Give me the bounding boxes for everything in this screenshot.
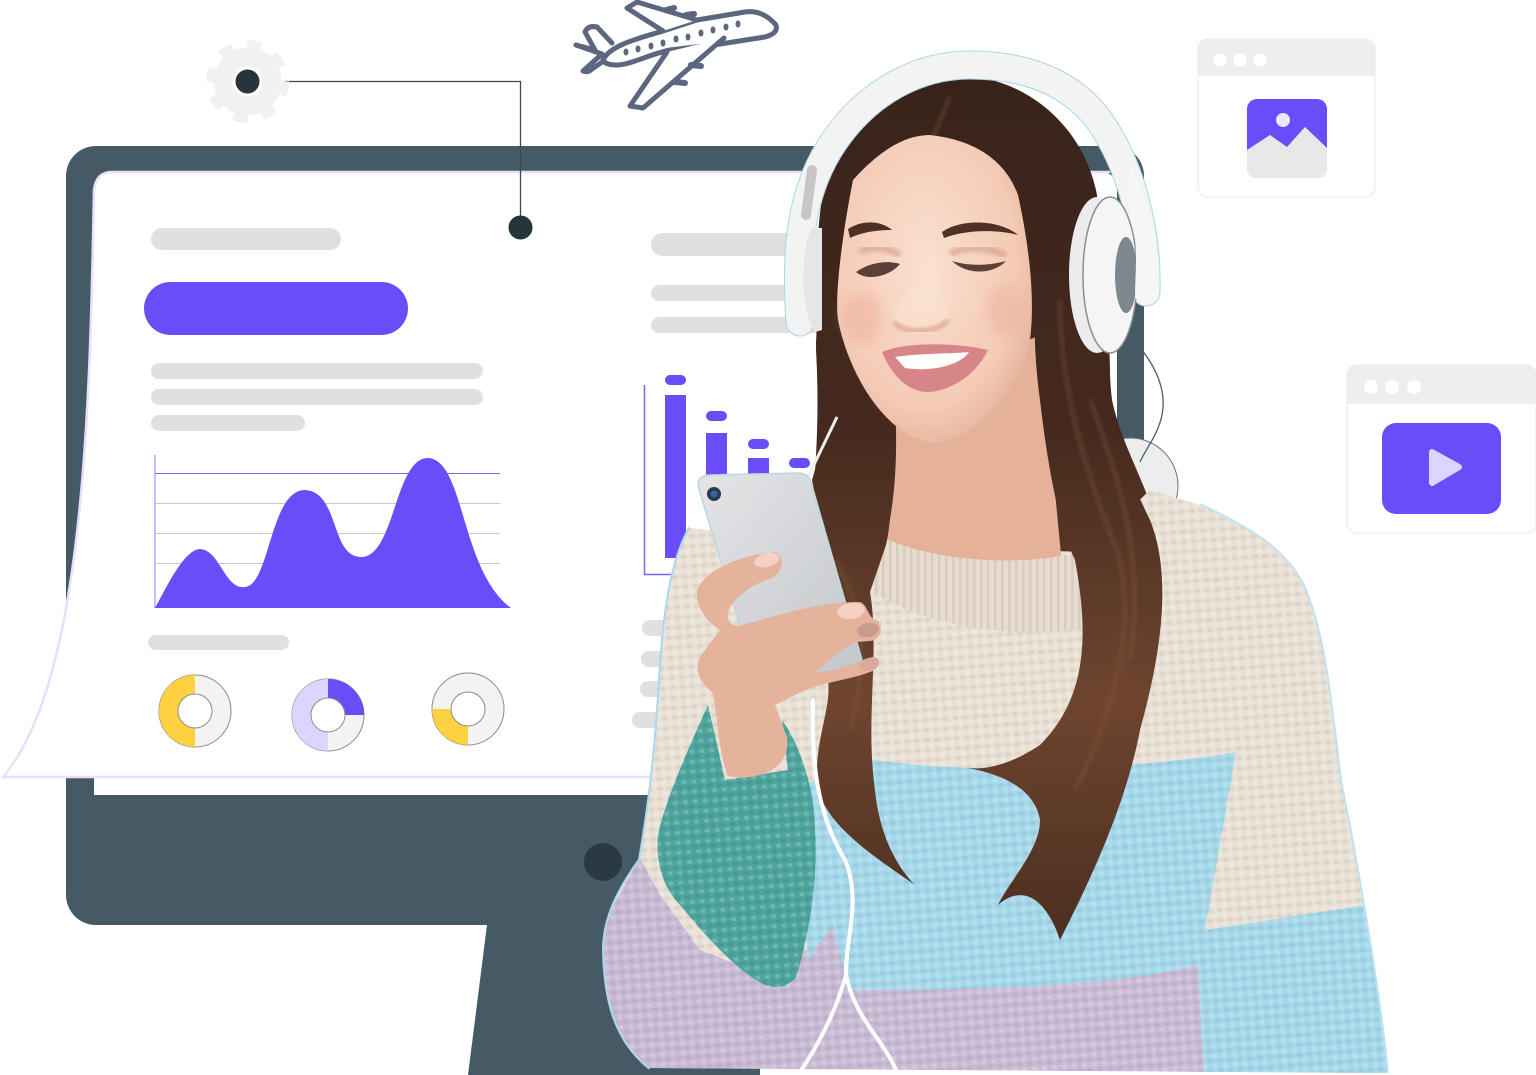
monitor screen (94, 172, 1117, 795)
mouth (882, 344, 988, 392)
grey circle behind shoulder with wire (1082, 332, 1178, 534)
sweater collar (872, 538, 1088, 632)
donut chart 1 (159, 675, 231, 747)
headphone band (798, 65, 1146, 322)
phone (698, 473, 862, 677)
eyebrows (848, 222, 1018, 238)
nose (894, 250, 948, 331)
sweater (590, 480, 1400, 1075)
curled paper document (3, 172, 1110, 777)
image window card (1198, 39, 1375, 197)
hair right strands (968, 130, 1162, 940)
fingernails (753, 550, 880, 672)
sweater blue stripe (795, 752, 1400, 1075)
knit texture (590, 480, 1400, 1075)
face (837, 135, 1032, 443)
right panel: text lines (632, 233, 821, 728)
gear connector line (285, 82, 532, 240)
hair highlights (835, 97, 1134, 790)
hair left strands (812, 330, 915, 885)
sweater purple stripe (790, 950, 1210, 1075)
icon: airplane (576, 2, 776, 108)
left sleeve purple (600, 858, 850, 1072)
right ear cup (1069, 165, 1158, 353)
hand holding phone (697, 552, 881, 777)
bar chart (644, 375, 810, 574)
monitor power button (584, 843, 622, 881)
icon: gear (210, 44, 284, 118)
left ear cup (803, 228, 822, 332)
icon: picture (1247, 99, 1327, 178)
earphone cable (800, 700, 898, 1075)
icon: play button (1382, 423, 1501, 514)
donut chart 2 (292, 679, 364, 751)
eyes (856, 248, 1006, 277)
video window card (1347, 365, 1536, 533)
monitor body (66, 146, 1144, 1075)
cheek blush (842, 284, 1023, 344)
donut chart 3 (432, 673, 504, 745)
hair back layer (812, 76, 1165, 570)
monitor stand (468, 925, 760, 1075)
purple button (144, 282, 408, 335)
left panel: heading and text lines (148, 228, 483, 650)
neck and chest skin (885, 335, 1062, 567)
area chart (155, 455, 511, 608)
cable from neck area (808, 417, 837, 477)
teal cuff (657, 705, 816, 987)
